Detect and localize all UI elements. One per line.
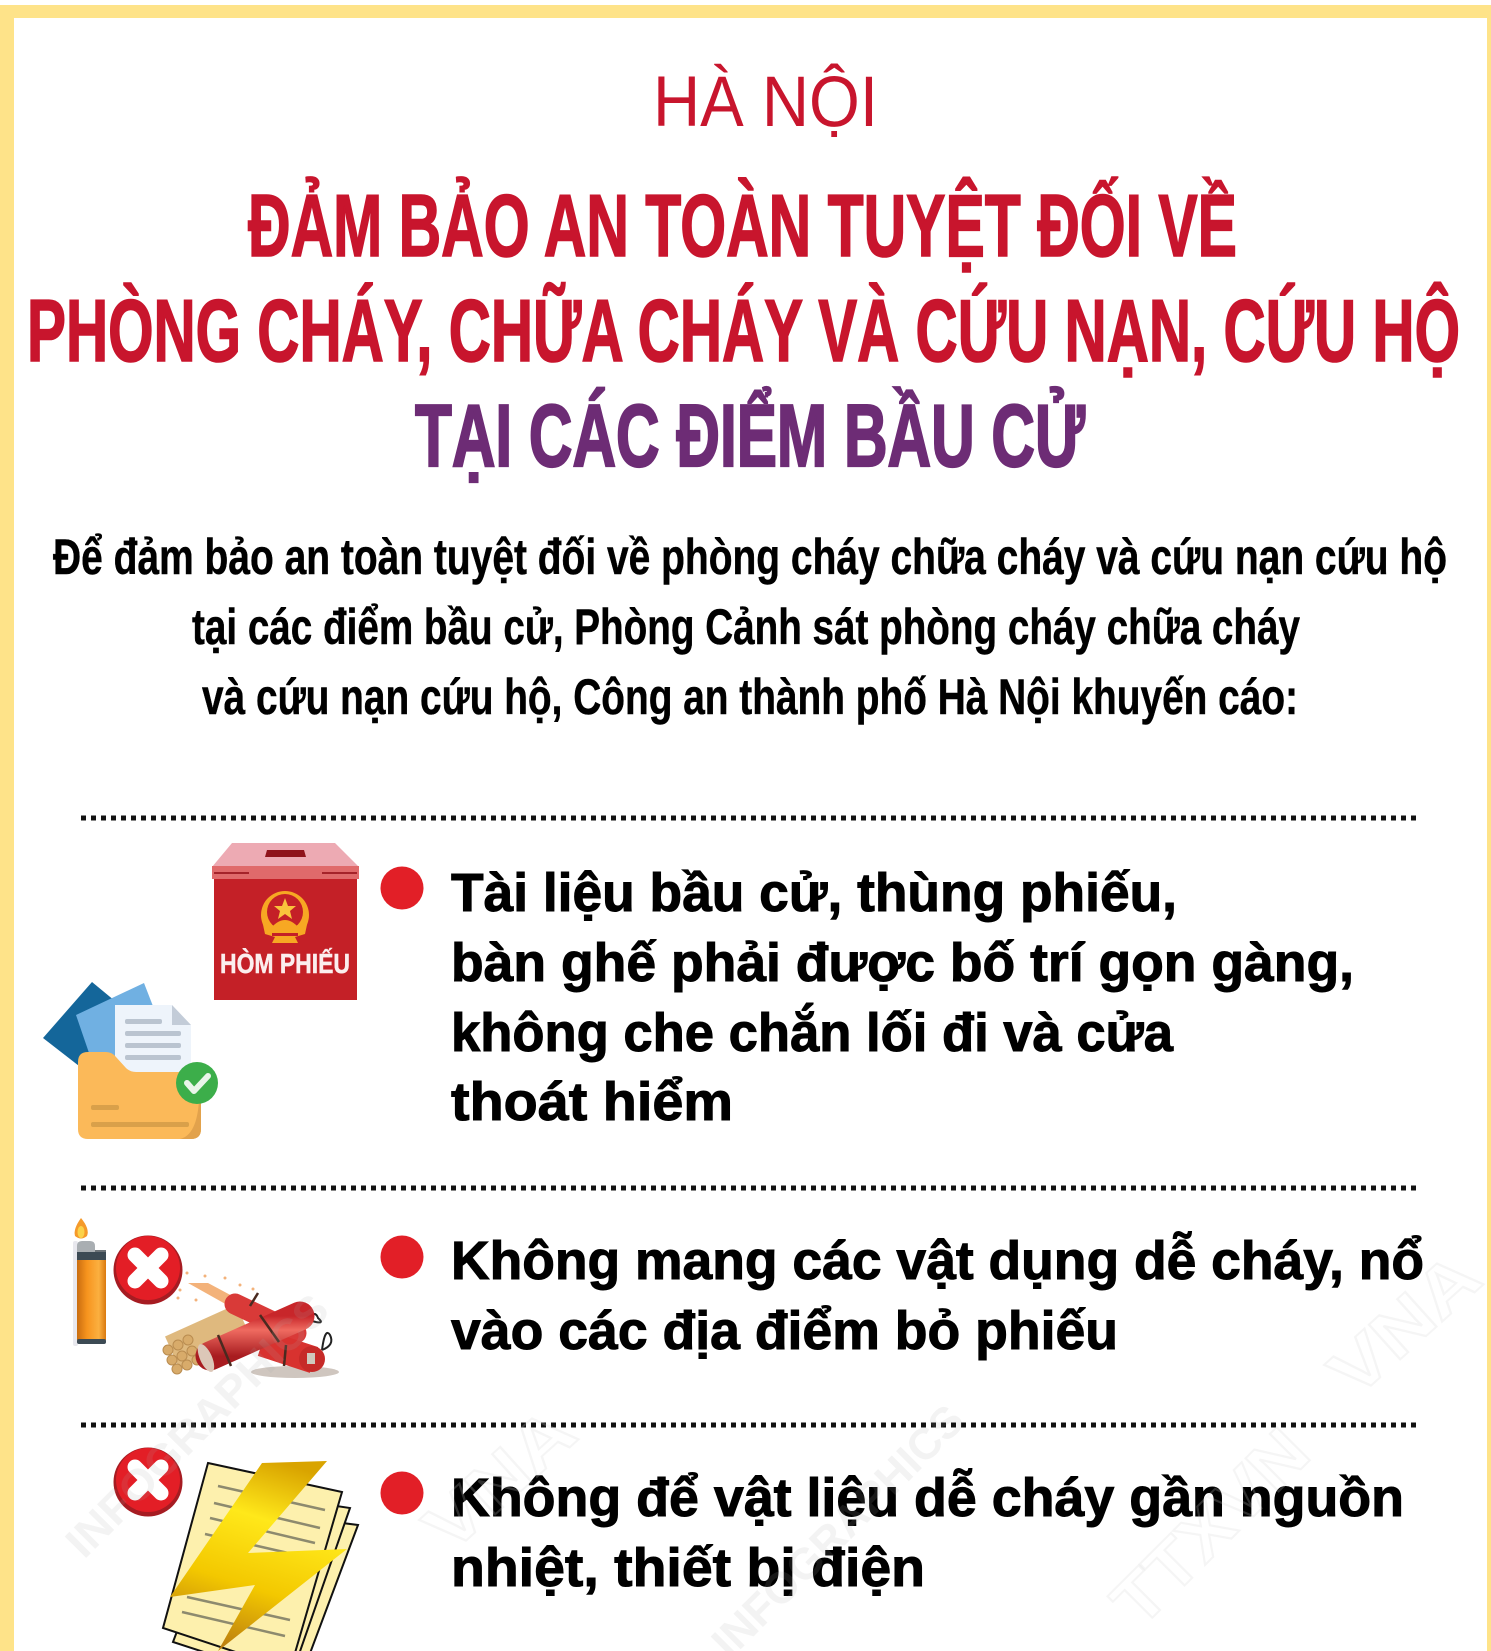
text: item 2: vào các địa điểm bỏ phiếu bbox=[451, 1301, 1118, 1361]
text: item 3: Không để vật liệu dễ cháy gần nguồn bbox=[451, 1468, 1404, 1528]
text: item 3: nhiệt, thiết bị điện bbox=[451, 1538, 925, 1598]
watermark bbox=[56, 1238, 1491, 1651]
icon: ballot box bbox=[212, 843, 359, 1000]
text: item 1: bàn ghế phải được bố trí gọn gàng, bbox=[451, 933, 1354, 993]
watermark: INFOGRAPHICS bbox=[56, 1285, 339, 1567]
icon: state emblem bbox=[261, 891, 309, 943]
text: item 2: Không mang các vật dụng dễ cháy, nổ bbox=[451, 1231, 1424, 1291]
icon: dynamite bbox=[163, 1272, 339, 1378]
text: item 1: không che chắn lối đi và cửa bbox=[451, 1003, 1174, 1063]
ballot box label: HÒM PHIẾU bbox=[220, 948, 350, 979]
watermark: TTXVN bbox=[1097, 1414, 1324, 1641]
intro text bbox=[53, 529, 1447, 725]
icon: lighter bbox=[73, 1218, 106, 1346]
text: item 1 bbox=[451, 863, 1354, 1132]
watermark: VNA bbox=[1314, 1238, 1491, 1411]
title bbox=[27, 176, 1460, 485]
watermark: VNA bbox=[409, 1393, 590, 1566]
title: TẠI CÁC ĐIỂM BẦU CỬ bbox=[415, 386, 1085, 485]
text: item 3 bbox=[451, 1468, 1404, 1598]
icon: papers with lightning bolt bbox=[163, 1461, 358, 1651]
text: item 1: Tài liệu bầu cử, thùng phiếu, bbox=[451, 863, 1177, 923]
icon: prohibited mark 1 bbox=[114, 1236, 182, 1304]
heading: location: HÀ NỘI bbox=[653, 63, 878, 142]
text: item 1: thoát hiểm bbox=[451, 1072, 733, 1132]
bullet 2 bbox=[380, 1236, 424, 1278]
sparks bbox=[176, 1272, 254, 1306]
bullet 3 bbox=[380, 1472, 424, 1514]
text: item 2 bbox=[451, 1231, 1424, 1361]
icon: folder with documents bbox=[43, 982, 218, 1139]
icon: prohibited mark 2 bbox=[114, 1448, 182, 1516]
bullet 1 bbox=[380, 866, 424, 910]
